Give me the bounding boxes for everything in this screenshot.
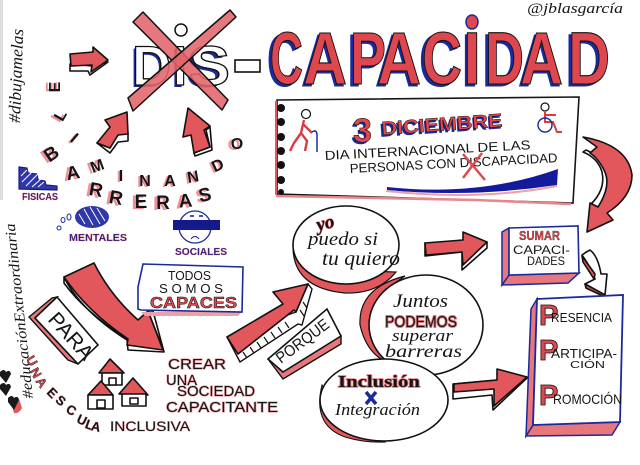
crossed word DIS: S (186, 36, 226, 99)
box: presencia participacion promocion: P (539, 335, 558, 367)
bubble: juntos podemos superar barreras (360, 275, 483, 375)
bubble: juntos podemos superar barreras: barreras (385, 341, 462, 361)
text: crear una sociedad capacitante: UNA (166, 372, 197, 389)
title: capacidad: D (485, 17, 524, 100)
arrow: big curved right (583, 137, 632, 232)
curved text: barreras: A (61, 163, 79, 186)
curved text: una escuela inclusiva: E (44, 384, 61, 401)
curved text: eliminando: D (207, 157, 225, 177)
title: capacidad: D (568, 17, 610, 100)
spiral binding (277, 104, 285, 195)
crossed word DIS (130, 24, 230, 99)
arrow: to sumar (425, 232, 487, 270)
curved text: barreras: A (175, 191, 191, 214)
icon: social face (173, 211, 220, 243)
curved text: una escuela inclusiva (23, 353, 191, 435)
curved text: barreras: R (104, 188, 122, 211)
date (351, 111, 503, 152)
arrow: large curved down (64, 263, 164, 352)
box: presencia participacion promocion: P (539, 380, 558, 412)
box: todos somos capaces: CAPACES (150, 295, 237, 312)
bubble: juntos podemos superar barreras: superar (392, 326, 453, 345)
box: presencia participacion promocion: P (539, 300, 558, 332)
curved text: eliminando: L (48, 108, 68, 125)
curved text: una escuela inclusiva: A (90, 418, 103, 435)
curved text: eliminando: E (47, 81, 64, 92)
house top (99, 359, 124, 385)
panel: 3 diciembre (276, 97, 579, 204)
arrow: to dis (70, 47, 108, 75)
date: DICIEMBRE (379, 113, 502, 142)
crossed word DIS: I (171, 36, 185, 99)
curved text: una escuela inclusiva: N (27, 365, 45, 381)
curved text: barreras: A (64, 162, 82, 185)
curved text: barreras: B (40, 142, 63, 167)
bubble: yo puedo si tu quiero (293, 206, 400, 293)
houses (88, 359, 148, 409)
curved text: barreras: R (87, 179, 105, 202)
icon: mental cloud (57, 206, 109, 230)
title: capacidad: C (419, 19, 459, 102)
arrow: up (183, 108, 212, 156)
title: capacidad: D (482, 19, 521, 102)
date: DICIEMBRE (381, 111, 503, 140)
title: capacidad: A (301, 19, 345, 102)
box: todos somos capaces (138, 264, 243, 316)
box: presencia participacion promocion: ROMOCIÓN (553, 391, 622, 407)
curved text: una escuela inclusiva: U (74, 411, 89, 429)
title: dis crossed out (128, 10, 260, 111)
curved text: eliminando: N (184, 169, 198, 188)
crossed word DIS: D (130, 36, 169, 99)
date: 3 (353, 112, 372, 150)
curved text: eliminando: D (209, 156, 227, 176)
curved text: eliminando: I (67, 131, 81, 146)
dash (235, 60, 260, 72)
title: capacidad: A (303, 17, 347, 100)
title: capacidad: P (350, 17, 386, 100)
curved text: una escuela inclusiva: S (53, 392, 69, 409)
curved text: barreras: E (132, 193, 144, 214)
label: porque: PORQUE (273, 316, 333, 367)
curved text: barreras: S (194, 185, 210, 208)
curved text: eliminando: A (164, 173, 176, 190)
curved text: eliminando: A (162, 174, 174, 191)
curved text: una escuela inclusiva: INCLUSIVA (110, 418, 191, 434)
curved text: eliminando: N (137, 174, 149, 191)
bubble: inclusion integracion: Inclusión (338, 372, 421, 391)
curved text: barreras: E (135, 192, 147, 213)
curved text: barreras (37, 142, 213, 215)
arrow: to presencia (453, 369, 527, 410)
title: capacidad: C (270, 17, 303, 100)
title: capacidad: A (520, 17, 563, 100)
title: capacidad: A (377, 17, 421, 100)
blue swoosh (387, 169, 558, 193)
label: mentales: MENTALES (69, 232, 127, 244)
icon: person with cane (290, 110, 317, 152)
curved text: barreras: R (156, 193, 170, 214)
bubble: juntos podemos superar barreras: Juntos (393, 291, 448, 312)
red cross (128, 10, 236, 111)
curved text: eliminando (44, 81, 243, 191)
title: capacidad: C (267, 19, 300, 102)
date: 3 (351, 114, 370, 152)
box: presencia participacion promocion: ARTICIPA- (551, 346, 617, 361)
label: para: PARA (43, 308, 98, 365)
curved text: una escuela inclusiva: A (33, 374, 51, 391)
curved text: eliminando: N (139, 173, 151, 190)
curved text: eliminando: I (117, 169, 121, 186)
title: capacidad: C (422, 17, 462, 100)
bubble: yo puedo si tu quiero: tu quiero (322, 248, 400, 270)
title: capacidad: D (565, 19, 607, 102)
icon: hearts (0, 370, 22, 413)
text: crear una sociedad capacitante: CAPACITANTE (166, 399, 278, 416)
author handle: @jblasgarcía (527, 1, 623, 17)
bubble: yo puedo si tu quiero: puedo si (306, 229, 378, 250)
hashtag: educacion extraordinaria: #educaciónExtraordinaria (3, 223, 37, 399)
curved text: eliminando: O (228, 137, 240, 154)
curved text: eliminando: M (85, 158, 104, 178)
curved text: barreras: A (178, 190, 194, 213)
curved text: barreras: R (84, 180, 102, 203)
text: crear una sociedad capacitante (166, 356, 278, 416)
curved text: eliminando: I (65, 132, 79, 147)
curved text: eliminando: M (88, 157, 107, 177)
bubble: inclusion integracion: Integración (334, 400, 420, 419)
title: capacidad: I (461, 19, 479, 102)
label: para (29, 297, 98, 365)
hashtag: dibujamelas: #dibujamelas (5, 28, 27, 123)
box: todos somos capaces: TODOS (168, 268, 211, 283)
title: capacidad: A (518, 19, 561, 102)
title: capacidad: I (463, 17, 481, 100)
label: sociales: SOCIALES (175, 247, 227, 258)
box: sumar capacidades (502, 226, 579, 285)
panel: 3 diciembre: PERSONAS CON DISCAPACIDAD (349, 150, 558, 176)
box: sumar capacidades: SUMAR (519, 228, 561, 243)
text: crear una sociedad capacitante: SOCIEDAD (177, 383, 255, 400)
curved text: barreras: R (107, 187, 125, 210)
small cross (463, 153, 485, 180)
box: presencia participacion promocion (526, 295, 623, 436)
curved text: eliminando: N (186, 168, 200, 187)
curved text: barreras: S (197, 184, 213, 207)
box: sumar capacidades: CAPACI- (513, 243, 570, 257)
curved text: eliminando: O (231, 136, 243, 153)
title: capacidad: P (347, 19, 383, 102)
curved text: barreras: B (37, 143, 60, 168)
box: presencia participacion promocion: CIÓN (570, 358, 605, 371)
curved text: eliminando: I (119, 168, 123, 185)
curved text: una escuela inclusiva: L (83, 416, 96, 433)
curved text: eliminando: L (51, 107, 71, 124)
house left (88, 381, 113, 409)
bubble: juntos podemos superar barreras: PODEMOS (385, 314, 457, 331)
arrow: up right (227, 284, 312, 362)
event text: DIA INTERNACIONAL DE LAS (324, 137, 531, 163)
label: fisicas: FISICAS (22, 192, 58, 203)
crossed word DIS: I (173, 34, 187, 97)
box: sumar capacidades: DADES (527, 254, 565, 268)
curved text: una escuela inclusiva: C (63, 401, 80, 419)
title: capacidad (267, 15, 610, 102)
house right (119, 378, 148, 406)
icon: physical barriers (19, 167, 57, 190)
icon: wheelchair (538, 103, 562, 132)
text: crear una sociedad capacitante: CREAR (168, 356, 226, 373)
crossed word DIS: D (132, 34, 171, 97)
bubble: inclusion integracion (320, 359, 448, 442)
bubble: yo puedo si tu quiero: yo (312, 211, 337, 236)
curved text: barreras: R (153, 194, 167, 215)
curved text: una escuela inclusiva: U (23, 353, 41, 369)
title: capacidad: A (375, 19, 419, 102)
arrow: diagonal up right (97, 112, 128, 153)
crossed word DIS: S (189, 34, 230, 97)
box: presencia participacion promocion: RESENCIA (551, 310, 612, 325)
box: todos somos capaces: S O M O S (159, 281, 223, 296)
curved text: eliminando: E (44, 81, 61, 92)
arrow: down to list (582, 250, 607, 297)
